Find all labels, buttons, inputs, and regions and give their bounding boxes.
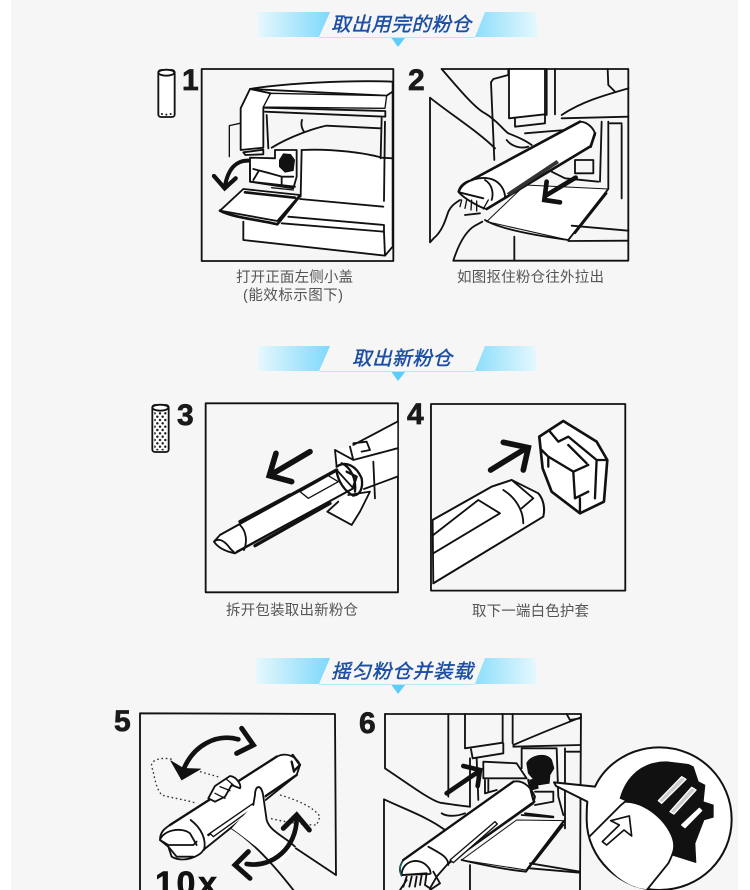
caption step 1 note: (能效标示图下) [243, 287, 343, 304]
panels: steps 3 and 4 [152, 403, 625, 592]
icon: new cartridge [152, 405, 169, 452]
arrow: swing cover [214, 161, 249, 188]
panel: step 5 shake [140, 713, 336, 890]
hand fingers [208, 776, 240, 802]
black collar [620, 762, 713, 863]
heading: take out new cartridge: 取出新粉仓 [352, 348, 454, 370]
panel: step 2 pull out cartridge [430, 69, 628, 261]
fins [658, 777, 702, 828]
arrow: pull out tube [269, 452, 310, 482]
heading: take out new cartridge [258, 346, 537, 381]
cartridge [458, 122, 595, 209]
step number 6: 6 [359, 707, 376, 740]
step number 3: 3 [177, 399, 194, 432]
caption step 4: 取下一端白色护套 [472, 603, 590, 620]
cartridge [160, 755, 300, 859]
open door [220, 189, 300, 221]
step number 1: 1 [182, 64, 199, 97]
panel: step 1 open side cover [202, 69, 393, 261]
hollow arrow [602, 816, 632, 845]
heading: shake and install: 摇匀粉仓并装载 [331, 661, 475, 683]
door [462, 820, 563, 870]
panel: step 6 install [384, 714, 581, 890]
arrow: toward cap [491, 442, 528, 470]
icon: empty cartridge [158, 70, 175, 117]
heading: take out used cartridge [258, 12, 538, 47]
cartridge [400, 781, 535, 888]
heading: take out used cartridge: 取出用完的粉仓 [331, 14, 473, 36]
hand with thumb [232, 787, 297, 863]
callout: zoomed detail [554, 747, 732, 890]
cartridge end [590, 802, 674, 889]
caption step 2: 如图抠住粉仓往外拉出 [457, 269, 604, 286]
arrow: rotate down [235, 815, 309, 878]
panel: step 3 unpack [206, 403, 398, 592]
step number 5: 5 [114, 705, 131, 738]
caption step 3: 拆开包装取出新粉仓 [226, 602, 358, 619]
step number 2: 2 [408, 64, 425, 97]
step number 4: 4 [407, 398, 424, 431]
door [487, 185, 608, 240]
arrow: pull out [544, 178, 576, 202]
icon: black toner port [527, 755, 554, 785]
icon: black toner port [279, 154, 295, 172]
panel: step 4 remove cap [431, 404, 625, 591]
caption step 1: 打开正面左侧小盖 [236, 269, 353, 286]
arrow: push in [447, 766, 480, 793]
hand [400, 813, 465, 890]
arrow: rotate up [171, 728, 253, 780]
heading: shake and install [256, 658, 537, 694]
